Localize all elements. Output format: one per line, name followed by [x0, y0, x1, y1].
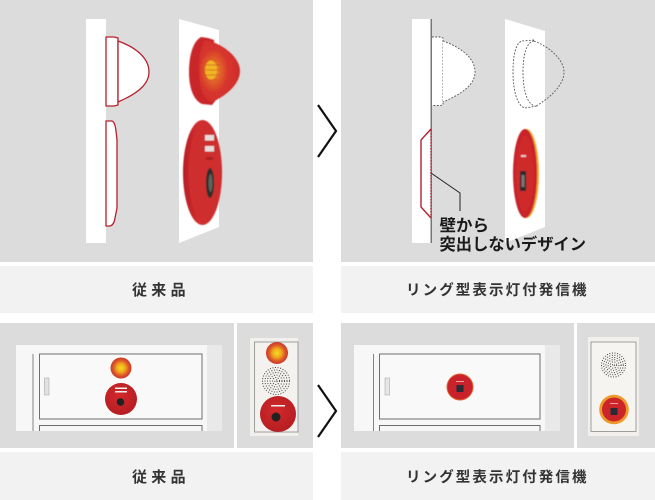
label: conventional product top: 従来品 [132, 282, 190, 299]
callout: 壁から [440, 216, 489, 235]
panel: ring-type unit close-up [577, 323, 655, 448]
label: conventional product bottom [0, 452, 313, 500]
arrow: top comparison [318, 105, 336, 157]
panel: conventional installed on cabinet [0, 323, 234, 448]
callout: 突出しないデザイン [440, 235, 586, 254]
cabinet [16, 345, 222, 431]
side-view wall [86, 19, 106, 243]
wall line [430, 19, 432, 243]
leader line [431, 173, 460, 211]
dashed lamp perspective [513, 40, 564, 108]
photo: protruding button [183, 120, 222, 225]
arrow: bottom comparison [318, 385, 336, 437]
button [260, 396, 296, 432]
label: conventional product top [0, 266, 313, 313]
panel: ring-type installed on cabinet [341, 323, 574, 448]
side outline: dashed lamp [432, 37, 475, 106]
speaker grille [602, 353, 626, 377]
panel: ring-type product side views [341, 0, 655, 262]
label: ring-type product bottom: リング型表示灯付発信機 [406, 468, 589, 486]
label: ring-type product top: リング型表示灯付発信機 [406, 281, 589, 299]
button [105, 383, 137, 415]
panel: conventional product side views [0, 0, 313, 262]
side outline: conventional lamp [106, 37, 149, 106]
photo: protruding lamp [189, 37, 240, 105]
lamp [110, 358, 132, 378]
label: ring-type product bottom [341, 452, 655, 500]
speaker grille [262, 368, 290, 394]
side-view wall [412, 19, 431, 243]
ring button [599, 395, 629, 424]
recessed button outline [421, 129, 431, 218]
lamp [266, 342, 288, 364]
side outline: conventional button [106, 121, 117, 226]
callout [440, 216, 586, 254]
perspective wall [179, 19, 219, 243]
photo: ring button [513, 129, 539, 218]
label: ring-type product top [341, 266, 655, 313]
ring button [446, 374, 474, 400]
label: conventional product bottom: 従来品 [132, 469, 190, 486]
cabinet [354, 345, 560, 431]
perspective wall [505, 19, 545, 243]
panel: conventional unit close-up [237, 323, 313, 448]
